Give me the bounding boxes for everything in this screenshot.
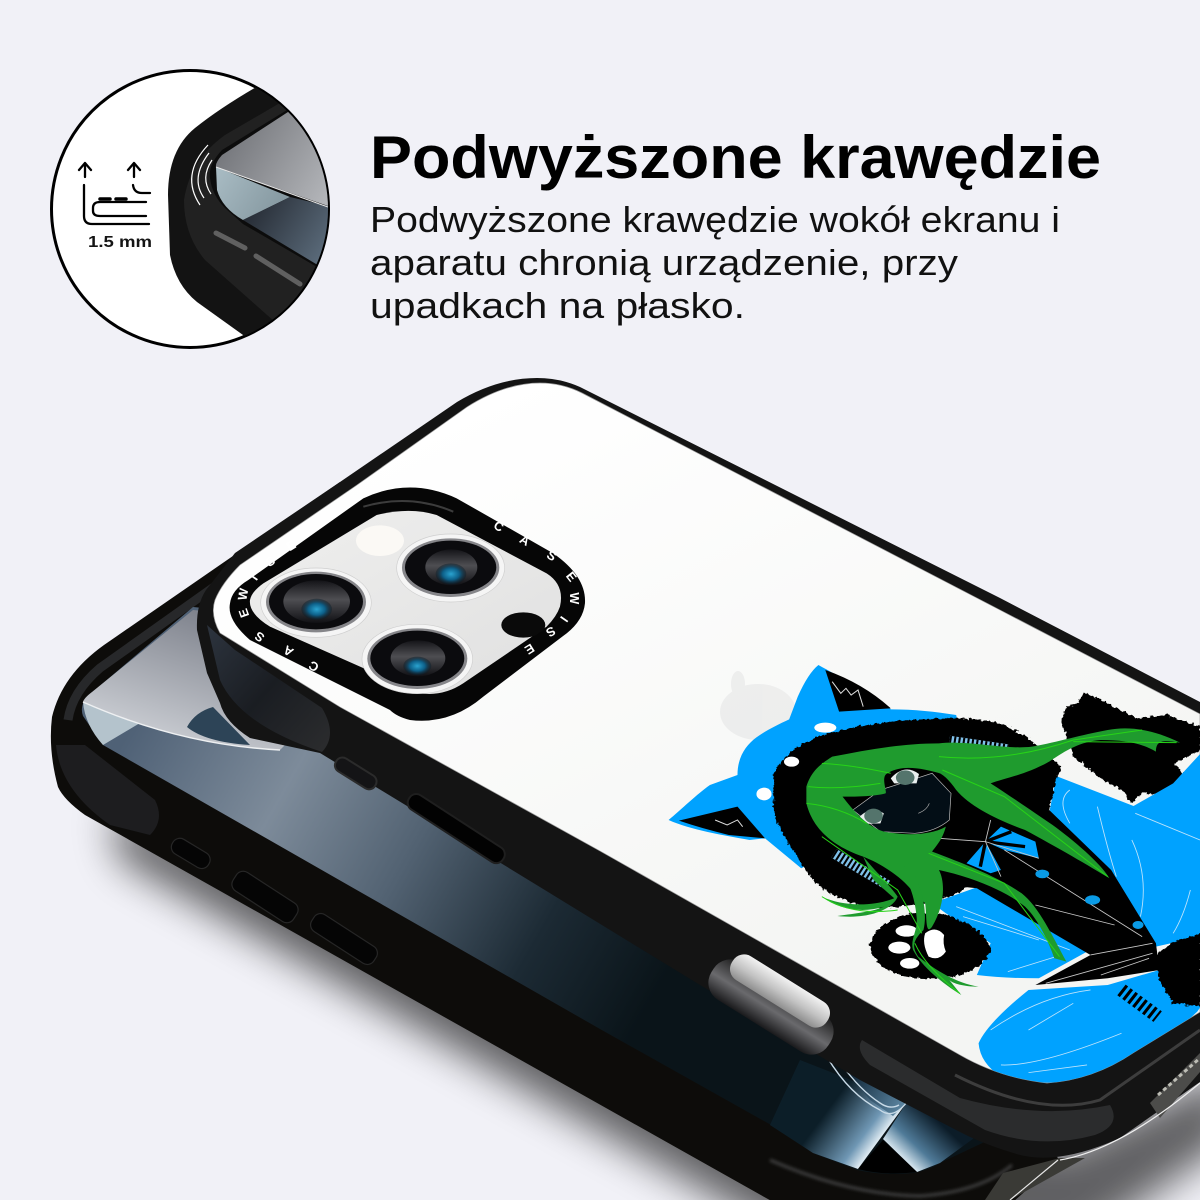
camera bump: [230, 487, 585, 721]
CASEWISE lettering: I: [247, 572, 261, 583]
lower case buttons: [168, 835, 380, 968]
inset circle: raised edge close-up: [52, 70, 350, 348]
case back: clear white: [213, 383, 1200, 1083]
CASEWISE lettering: S: [252, 628, 267, 645]
green hair: [806, 728, 1180, 995]
CASEWISE lettering: C: [491, 518, 506, 535]
drop shadow: [110, 810, 1200, 1200]
left sleeve: [932, 887, 1087, 978]
CASEWISE lettering: E: [284, 538, 298, 554]
title: Podwyższone krawędzie: [370, 124, 1101, 191]
phone case illustration: [51, 378, 1200, 1200]
cuff stripes: [1121, 990, 1158, 1017]
CASEWISE lettering: C: [306, 658, 321, 674]
face: [853, 773, 951, 833]
side buttons and mic: [332, 755, 508, 866]
label: 1.5 mm: 1.5 mm: [88, 234, 152, 251]
description text: upadkach na płasko.: [370, 285, 745, 326]
right paw: [1156, 933, 1200, 1007]
apple logo ghost: [720, 671, 796, 740]
CASEWISE lettering: S: [263, 554, 278, 570]
CASEWISE lettering: S: [543, 623, 558, 640]
ears: [679, 670, 891, 838]
camera ring: [230, 487, 585, 721]
CASEWISE lettering: A: [281, 642, 296, 659]
description text: aparatu chronią urządzenie, przy: [370, 242, 958, 283]
lower phone screen: [82, 607, 1010, 1174]
CASEWISE lettering: S: [544, 548, 559, 564]
fur hood: [774, 718, 1061, 908]
CASEWISE lettering: [235, 518, 581, 674]
CASEWISE lettering: E: [563, 569, 579, 584]
CASEWISE lettering: W: [235, 587, 251, 601]
description text: Podwyższone krawędzie wokół ekranu i: [370, 199, 1060, 240]
hood details: [756, 723, 836, 800]
tail: [1061, 692, 1200, 803]
lens 2: [397, 534, 505, 602]
lower sleeve: [979, 970, 1200, 1083]
hood: [669, 665, 970, 868]
CASEWISE lettering: A: [517, 532, 532, 549]
right sleeve: [1049, 753, 1200, 947]
CASEWISE lettering: E: [236, 607, 252, 619]
body: [966, 810, 1158, 985]
camera plate: [250, 511, 561, 694]
left paw: [870, 913, 991, 978]
lens 1: [261, 568, 371, 637]
bow: [967, 827, 1039, 873]
artwork: cat-hood character: [669, 665, 1200, 1083]
lens 3: [362, 624, 473, 694]
scarf stripes: [834, 741, 1008, 885]
icon: raised edge diagram: [79, 163, 150, 224]
lower phone case frame: [51, 482, 1085, 1200]
screen glint: [770, 1057, 985, 1173]
charging port: [701, 949, 841, 1062]
CASEWISE lettering: I: [557, 613, 571, 624]
buttons: [1035, 870, 1144, 929]
CASEWISE lettering: W: [567, 592, 581, 604]
CASEWISE lettering: E: [522, 641, 537, 657]
upper phone case frame: [197, 378, 1200, 1160]
